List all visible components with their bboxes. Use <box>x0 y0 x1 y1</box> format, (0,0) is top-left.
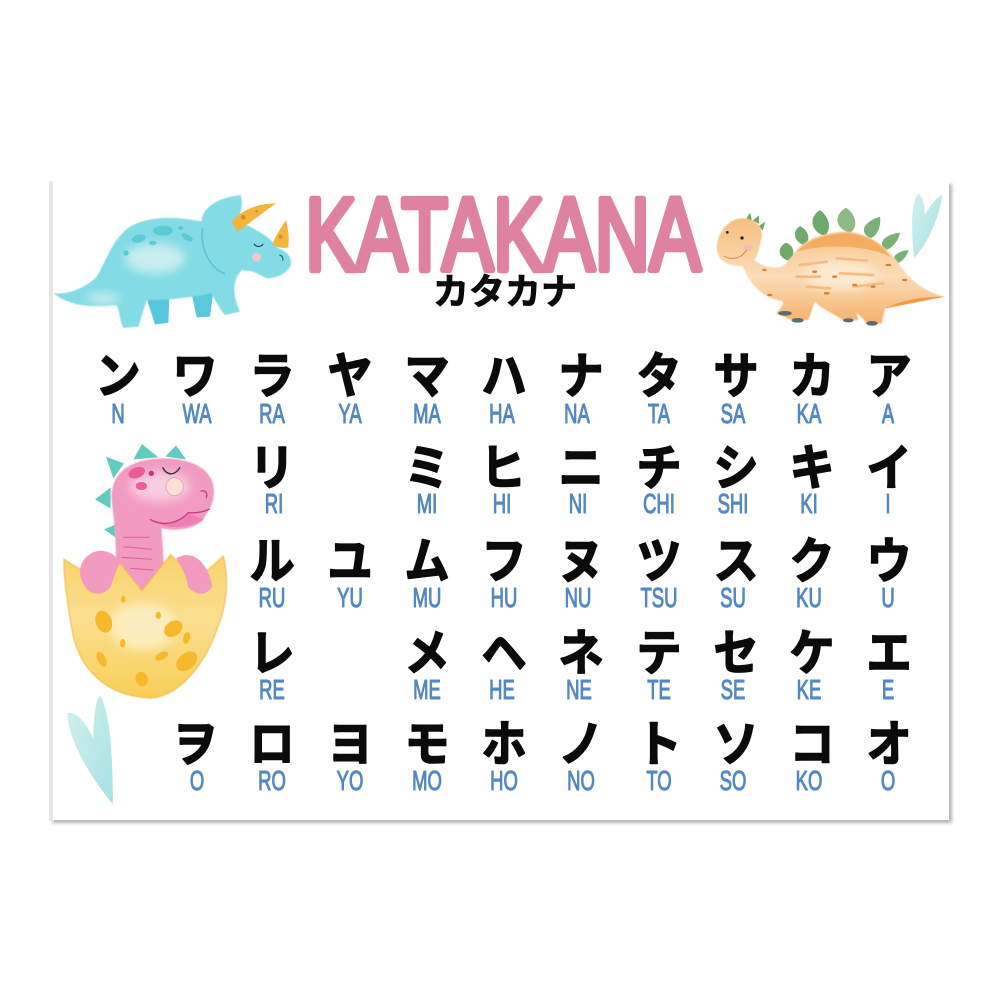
icon: pink dinosaur in egg <box>64 444 227 698</box>
cell: SU: ス <box>713 533 759 588</box>
cell: SU: SU <box>720 583 746 614</box>
title: KATAKANA <box>305 178 701 293</box>
cell: TSU <box>636 533 682 614</box>
cell: SO <box>713 716 759 797</box>
cell: YA: ヤ <box>327 348 373 403</box>
icon: orange stegosaurus <box>717 208 945 326</box>
cell: NI: NI <box>569 489 587 520</box>
cell: SU <box>713 533 759 614</box>
cell: MO: モ <box>404 716 450 771</box>
cell: KA: KA <box>797 399 821 430</box>
cell: NU: ヌ <box>558 533 604 588</box>
cell: E: エ <box>866 625 912 680</box>
cell: TO: TO <box>646 766 672 797</box>
icon: heart leaf top right <box>912 193 942 258</box>
cell: NE <box>558 625 604 706</box>
cell: HO <box>481 716 527 797</box>
cell: ME: ME <box>413 675 441 706</box>
cell: RU <box>249 533 295 614</box>
cell: YO: ヨ <box>327 716 373 771</box>
cell: HA <box>481 348 527 430</box>
cell: I <box>866 440 912 520</box>
cell: ME <box>404 625 450 706</box>
cell: RO: RO <box>258 766 286 797</box>
cell: YO: YO <box>337 766 363 797</box>
cell: WO (O) <box>172 716 218 797</box>
cell: HI: ヒ <box>480 440 526 495</box>
cell: SHI: SHI <box>718 489 748 520</box>
cell: U: U <box>881 583 895 614</box>
cell: KE: ケ <box>789 625 835 680</box>
cell: KE: KE <box>797 675 821 706</box>
cell: MU <box>404 533 450 614</box>
cell: HE: ヘ <box>481 625 527 680</box>
cell: YA: YA <box>338 399 362 430</box>
cell: HE: HE <box>489 675 515 706</box>
cell: TO: ト <box>636 716 682 771</box>
cell: TSU: TSU <box>641 583 677 614</box>
cell: RE: レ <box>249 625 295 680</box>
cell: RA: ラ <box>249 348 295 403</box>
cell: WA <box>172 348 218 430</box>
cell: MA: MA <box>413 399 441 430</box>
cell: NE: NE <box>566 675 592 706</box>
cell: KO: KO <box>796 766 822 797</box>
cell: E <box>866 625 912 706</box>
cell: HO: ホ <box>481 716 527 771</box>
cell: HA: ハ <box>481 348 527 403</box>
cell: SO: ソ <box>713 716 759 771</box>
cell: MO: MO <box>412 766 442 797</box>
cell: RE <box>249 625 295 706</box>
cell: SA: SA <box>721 399 745 430</box>
kana row 4 <box>249 625 912 706</box>
cell: MI: MI <box>417 489 437 520</box>
cell: WA: ワ <box>172 348 218 403</box>
cell: NO <box>558 716 604 797</box>
cell: KU: KU <box>796 583 822 614</box>
cell: RO <box>249 716 295 797</box>
cell: KO <box>789 716 835 797</box>
cell: O <box>866 716 912 797</box>
cell: SE <box>713 625 759 706</box>
icon: blue triceratops <box>53 195 291 328</box>
cell: RA <box>249 348 295 430</box>
cell: MU: MU <box>413 583 441 614</box>
cell: NI <box>558 440 604 520</box>
cell: YU <box>327 533 373 614</box>
cell: TE: テ <box>636 625 682 680</box>
cell: TSU: ツ <box>636 533 682 588</box>
poster card <box>49 181 952 823</box>
subtitle: カタカナ <box>433 271 577 312</box>
cell: SA: サ <box>713 348 759 403</box>
cell: A: A <box>882 399 894 430</box>
cell: MU: ム <box>404 533 450 588</box>
cell: KO: コ <box>789 716 835 771</box>
cell: NU: NU <box>565 583 591 614</box>
cell: TE <box>636 625 682 706</box>
cell: KI: キ <box>789 440 835 495</box>
cell: TA <box>636 348 682 430</box>
cell: O: オ <box>866 716 912 771</box>
cell: YU: ユ <box>327 533 373 588</box>
cell: N <box>95 348 141 430</box>
kana row 2 <box>249 440 912 520</box>
cell: MA: マ <box>404 348 450 403</box>
cell: YO <box>327 716 373 797</box>
cell: YU: YU <box>337 583 363 614</box>
cell: MI: ミ <box>404 440 450 495</box>
cell: KU: ク <box>789 533 835 588</box>
cell: TO <box>636 716 682 797</box>
cell: CHI: CHI <box>643 489 675 520</box>
cell: HE <box>481 625 527 706</box>
cell: CHI: チ <box>636 440 682 495</box>
cell: N: N <box>111 399 125 430</box>
cell: NA <box>558 348 604 430</box>
cell: YA <box>327 348 373 430</box>
cell: RO: ロ <box>249 716 295 771</box>
cell: CHI <box>636 440 682 520</box>
kana row 1 <box>95 348 912 430</box>
cell: KA: カ <box>789 348 835 403</box>
cell: KE <box>789 625 835 706</box>
cell: RU: ル <box>249 533 295 588</box>
cell: SA <box>713 348 759 430</box>
cell: TE: TE <box>647 675 671 706</box>
cell: TA: タ <box>636 348 682 403</box>
cell: NE: ネ <box>558 625 604 680</box>
cell: ME: メ <box>404 625 450 680</box>
cell: U: ウ <box>866 533 912 588</box>
cell: KU <box>789 533 835 614</box>
cell: HO: HO <box>490 766 518 797</box>
cell: TA: TA <box>648 399 670 430</box>
cell: I: I <box>885 489 891 520</box>
cell: WO (O): O <box>190 766 204 797</box>
cell: NO: NO <box>567 766 595 797</box>
cell: HU: HU <box>491 583 517 614</box>
cell: RA: RA <box>259 399 285 430</box>
cell: KA <box>789 348 835 430</box>
cell: RI: リ <box>249 440 295 495</box>
cell: NA: ナ <box>558 348 604 403</box>
cell: O: O <box>881 766 895 797</box>
kana row 5 <box>172 716 912 797</box>
cell: I: イ <box>866 440 912 495</box>
cell: SE: セ <box>713 625 759 680</box>
cell: E: E <box>882 675 894 706</box>
cell: HI: HI <box>493 489 511 520</box>
cell: MA <box>404 348 450 430</box>
cell: HU <box>481 533 527 614</box>
cell: N: ン <box>95 348 141 403</box>
cell: A <box>866 348 912 430</box>
cell: SHI: シ <box>713 440 759 495</box>
cell: RE: RE <box>259 675 285 706</box>
cell: MO <box>404 716 450 797</box>
cell: HU: フ <box>481 533 527 588</box>
icon: leaf bottom left <box>67 695 113 804</box>
cell: RI: RI <box>265 489 283 520</box>
cell: SE: SE <box>721 675 745 706</box>
cell: NA: NA <box>564 399 590 430</box>
cell: KI: KI <box>800 489 818 520</box>
cell: NO: ノ <box>558 716 604 771</box>
cell: WA: WA <box>182 399 212 430</box>
cell: HI <box>480 440 526 520</box>
cell: NI: ニ <box>558 440 604 495</box>
cell: KI <box>789 440 835 520</box>
cell: A: ア <box>866 348 912 403</box>
cell: MI <box>404 440 450 520</box>
kana row 3 <box>249 533 912 614</box>
cell: U <box>866 533 912 614</box>
cell: SHI <box>713 440 759 520</box>
cell: WO (O): ヲ <box>172 716 218 771</box>
cell: RU: RU <box>259 583 285 614</box>
cell: RI <box>249 440 295 520</box>
cell: NU <box>558 533 604 614</box>
cell: HA: HA <box>489 399 515 430</box>
cell: SO: SO <box>720 766 746 797</box>
